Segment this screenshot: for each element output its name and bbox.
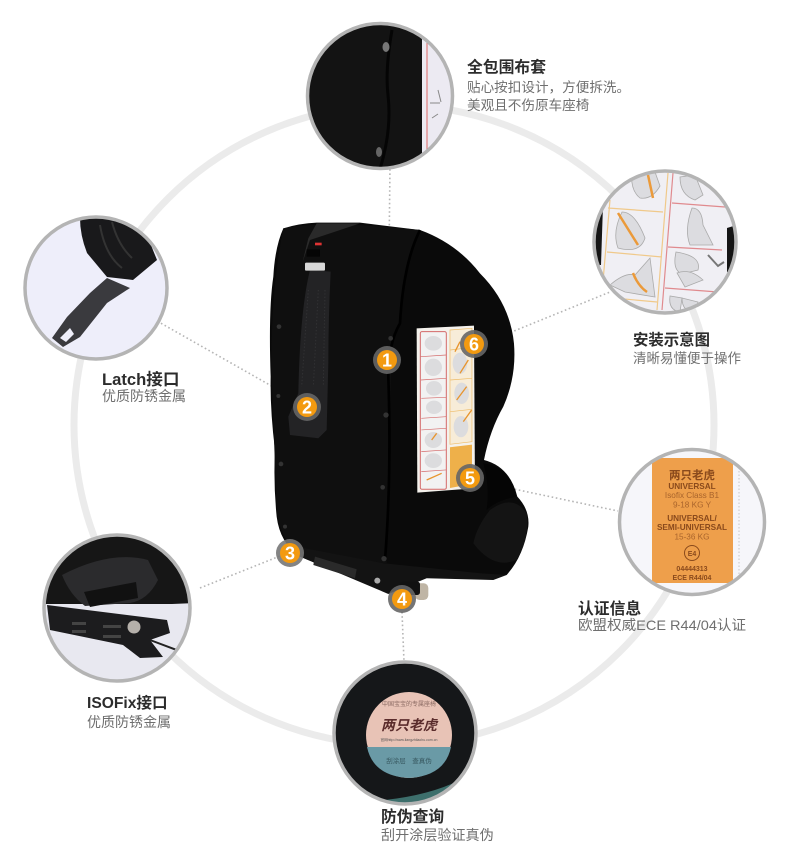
- instruction label: [417, 326, 475, 493]
- text: ISOFix: [87, 694, 171, 730]
- detail circle: certification label: 两只老虎: [669, 468, 715, 482]
- badge 3: [276, 539, 304, 567]
- latch strap: [288, 270, 331, 438]
- detail circle: certification label: 04444313: [676, 566, 708, 573]
- detail circle: anti-counterfeit sticker: 官网http://www.liangzhilaohu.com.cn: [381, 737, 437, 742]
- detail circle: certification label: 15-36 KG: [674, 532, 710, 542]
- background ring: [74, 105, 714, 745]
- badge 2: 2: [302, 398, 312, 418]
- detail circle: anti-counterfeit sticker: 中国宝宝的专属座椅: [382, 700, 436, 708]
- badge 3: 3: [285, 544, 295, 564]
- detail circle: certification label: E4: [688, 551, 696, 558]
- detail circle: certification label: Isofix Class B1: [665, 491, 720, 500]
- detail circle: certification label: ECE R44/04: [673, 575, 712, 582]
- dotted leader lines: [150, 165, 618, 662]
- detail circle: certification label: UNIVERSAL/: [667, 514, 718, 523]
- text: latch: 优质防锈金属: [102, 388, 186, 404]
- badge 5: [456, 464, 484, 492]
- detail circle: certification label: SEMI-UNIVERSAL: [657, 523, 727, 532]
- detail circle: fabric cover: [308, 24, 454, 169]
- text: ISOFix: 优质防锈金属: [87, 714, 171, 730]
- text: latch: Latch接口: [102, 370, 179, 389]
- text: fabric cover: 全包围布套: [467, 58, 546, 76]
- badge 1: 1: [382, 350, 392, 370]
- detail circle: latch connector: [25, 217, 167, 359]
- detail circle: anti-counterfeit sticker: 刮涂层 查真伪: [386, 756, 432, 765]
- detail circle: certification label: 9-18 KG Y: [673, 500, 712, 510]
- text: fabric cover: [467, 58, 630, 113]
- badge 2: [293, 393, 321, 421]
- text: ISOFix: ISOFix接口: [87, 694, 168, 712]
- text: installation diagram: 安装示意图: [633, 330, 710, 349]
- detail circle: anti-counterfeit sticker: [334, 662, 476, 810]
- text: anti-counterfeit: 防伪查询: [381, 807, 444, 826]
- car seat product photo: [270, 223, 529, 600]
- detail circle: installation diagram: [593, 171, 737, 313]
- badge 6: [460, 330, 488, 358]
- badge 4: 4: [397, 590, 407, 610]
- badge 5: 5: [465, 468, 475, 488]
- text: latch: [102, 370, 186, 404]
- snap buttons: [276, 324, 393, 561]
- detail circle: certification label: UNIVERSAL: [668, 482, 716, 491]
- text: anti-counterfeit: [381, 807, 494, 843]
- detail circle: ISOFix connector: [40, 535, 195, 681]
- detail circle: anti-counterfeit sticker: 两只老虎: [381, 717, 439, 733]
- badge 1: [373, 346, 401, 374]
- detail circle: certification label: [620, 450, 764, 595]
- text: installation diagram: [633, 330, 741, 366]
- text: certification: 欧盟权威ECE R44/04认证: [578, 617, 746, 633]
- text: installation diagram: 清晰易懂便于操作: [633, 351, 741, 366]
- text: certification: [578, 599, 746, 633]
- text: anti-counterfeit: 刮开涂层验证真伪: [381, 827, 494, 843]
- badge 6: 6: [469, 334, 479, 354]
- text: fabric cover: 贴心按扣设计，方便拆洗。: [467, 80, 630, 95]
- text: certification: 认证信息: [578, 599, 641, 618]
- badge 4: [388, 585, 416, 613]
- base frame: [297, 547, 507, 594]
- text: fabric cover: 美观且不伤原车座椅: [467, 97, 590, 113]
